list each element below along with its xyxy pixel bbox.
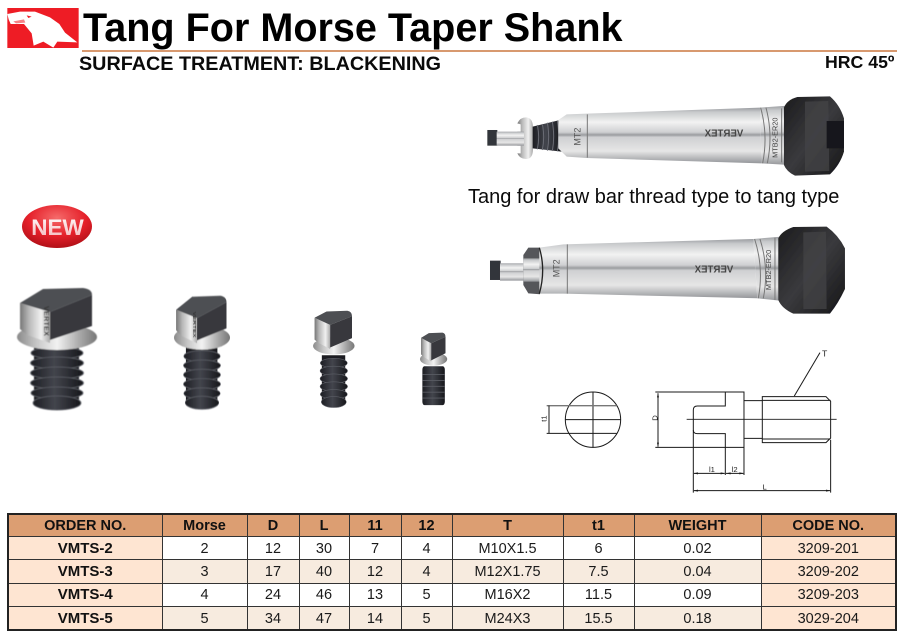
specification table: 3 — [200, 564, 209, 580]
specification table: 0.04 — [683, 564, 712, 580]
specification table: L — [320, 518, 328, 534]
tang product photo: Morse 5: VERTEX — [42, 306, 51, 336]
tool holder photo: draw bar thread type — [487, 96, 844, 176]
specification table: M16X2 — [485, 587, 530, 603]
tool holder photo: draw bar thread type: VERTEX — [704, 129, 743, 140]
specification table: 4 — [422, 541, 431, 557]
tool holder photo: tang type: MT2 — [551, 259, 561, 277]
specification table: 17 — [265, 564, 281, 580]
badge: NEW: NEW — [31, 215, 85, 240]
specification table: 24 — [265, 587, 281, 603]
specification table: ORDER NO. — [44, 518, 126, 534]
technical drawing: side view with dimensions: L — [763, 482, 767, 491]
tool holder photo: draw bar thread type: MTB2-ER20 — [771, 117, 780, 158]
technical drawing: side view with dimensions: l2 — [732, 465, 738, 474]
specification table: 0.09 — [683, 587, 712, 603]
specification table: M12X1.75 — [474, 564, 541, 580]
specification table: 5 — [422, 611, 431, 627]
title: Tang For Morse Taper Shank — [83, 6, 623, 50]
specification table: 46 — [316, 587, 332, 603]
specification table: 5 — [422, 587, 431, 603]
specification table: 11 — [367, 518, 383, 534]
title rule — [82, 50, 897, 52]
specification table: 5 — [200, 611, 209, 627]
specification table: 3209-203 — [798, 587, 859, 603]
logo: red eagle badge — [7, 8, 79, 48]
specification table: 12 — [367, 564, 383, 580]
specification table: Morse — [183, 518, 226, 534]
tool holder photo: tang type: VERTEX — [694, 264, 733, 275]
specification table: VMTS-4 — [58, 586, 113, 603]
technical drawing: end view: t1 — [540, 416, 549, 422]
specification table: 0.02 — [683, 541, 712, 557]
specification table: CODE NO. — [792, 518, 864, 534]
tang product photo: Morse 3 — [313, 311, 355, 408]
tang product photo: Morse 5 — [17, 288, 97, 410]
specification table — [7, 513, 897, 631]
technical drawing: side view with dimensions — [650, 349, 837, 493]
tool holder photo: tang type: MTB2-ER20 — [764, 250, 773, 290]
specification table: T — [503, 518, 512, 534]
subtitle: surface treatment: SURFACE TREATMENT: BLACKENING — [79, 53, 441, 75]
tang product photo: Morse 4 — [174, 296, 230, 409]
specification table: D — [268, 518, 278, 534]
specification table: 4 — [200, 587, 209, 603]
specification table: 12 — [265, 541, 281, 557]
specification table: 7.5 — [588, 564, 609, 580]
specification table: 7 — [371, 541, 379, 557]
specification table: 11.5 — [585, 587, 612, 603]
specification table: 13 — [367, 587, 383, 603]
specification table: 3209-201 — [798, 541, 859, 557]
specification table: 15.5 — [584, 611, 613, 627]
specification table: 0.18 — [683, 611, 712, 627]
specification table: VMTS-3 — [58, 563, 113, 580]
specification table: t1 — [592, 518, 605, 534]
specification table: M24X3 — [485, 611, 530, 627]
tang product photo: Morse 4: VERTEX — [191, 312, 196, 338]
specification table: WEIGHT — [668, 518, 726, 534]
specification table: M10X1.5 — [478, 541, 537, 557]
technical drawing: side view with dimensions: l1 — [709, 465, 715, 474]
specification table: VMTS-2 — [58, 540, 113, 557]
specification table: 40 — [316, 564, 332, 580]
specification table: 2 — [200, 541, 209, 557]
specification table: 34 — [265, 611, 281, 627]
badge: NEW — [22, 205, 92, 248]
specification table: 3029-204 — [798, 611, 859, 627]
tool holder photo: draw bar thread type: MT2 — [573, 128, 583, 146]
technical drawing: end view — [540, 392, 621, 448]
technical drawing: side view with dimensions: T — [822, 349, 828, 359]
specification table: 3209-202 — [798, 564, 859, 580]
specification table: VMTS-5 — [58, 610, 113, 627]
tang product photo: Morse 2 — [420, 333, 447, 405]
caption: tang type: Tang for draw bar thread type to tang type — [468, 186, 839, 208]
specification table: 12 — [418, 518, 435, 534]
specification table: 14 — [367, 611, 383, 627]
tool holder photo: tang type — [490, 227, 845, 314]
technical drawing: side view with dimensions: D — [650, 415, 659, 421]
hardness note: HRC 45º — [825, 52, 894, 72]
specification table: 47 — [316, 611, 332, 627]
specification table: 6 — [594, 541, 603, 557]
specification table: 4 — [422, 564, 431, 580]
specification table: 30 — [316, 541, 332, 557]
